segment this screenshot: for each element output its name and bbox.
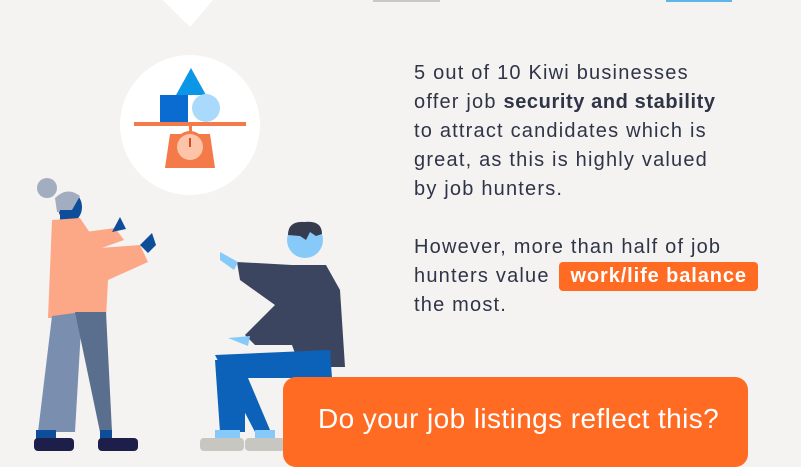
top strips — [164, 0, 732, 26]
illustration — [34, 55, 345, 451]
man — [200, 222, 345, 451]
text block: to attract candidates which is — [414, 120, 707, 142]
text block: However, more than half of job — [414, 236, 721, 258]
text block: work/life balance — [570, 265, 747, 287]
woman — [34, 178, 156, 451]
text block — [414, 62, 758, 316]
text block: 5 out of 10 Kiwi businesses — [414, 62, 689, 84]
text block: great, as this is highly valued — [414, 149, 708, 171]
text block: offer job security and stability — [414, 91, 716, 113]
text block: hunters value — [414, 265, 550, 287]
text block: the most. — [414, 294, 507, 316]
text block: by job hunters. — [414, 178, 563, 200]
callout: CTA — [283, 377, 748, 467]
callout: CTA: Do your job listings reflect this? — [318, 403, 719, 434]
icon: balance scale — [120, 55, 260, 195]
